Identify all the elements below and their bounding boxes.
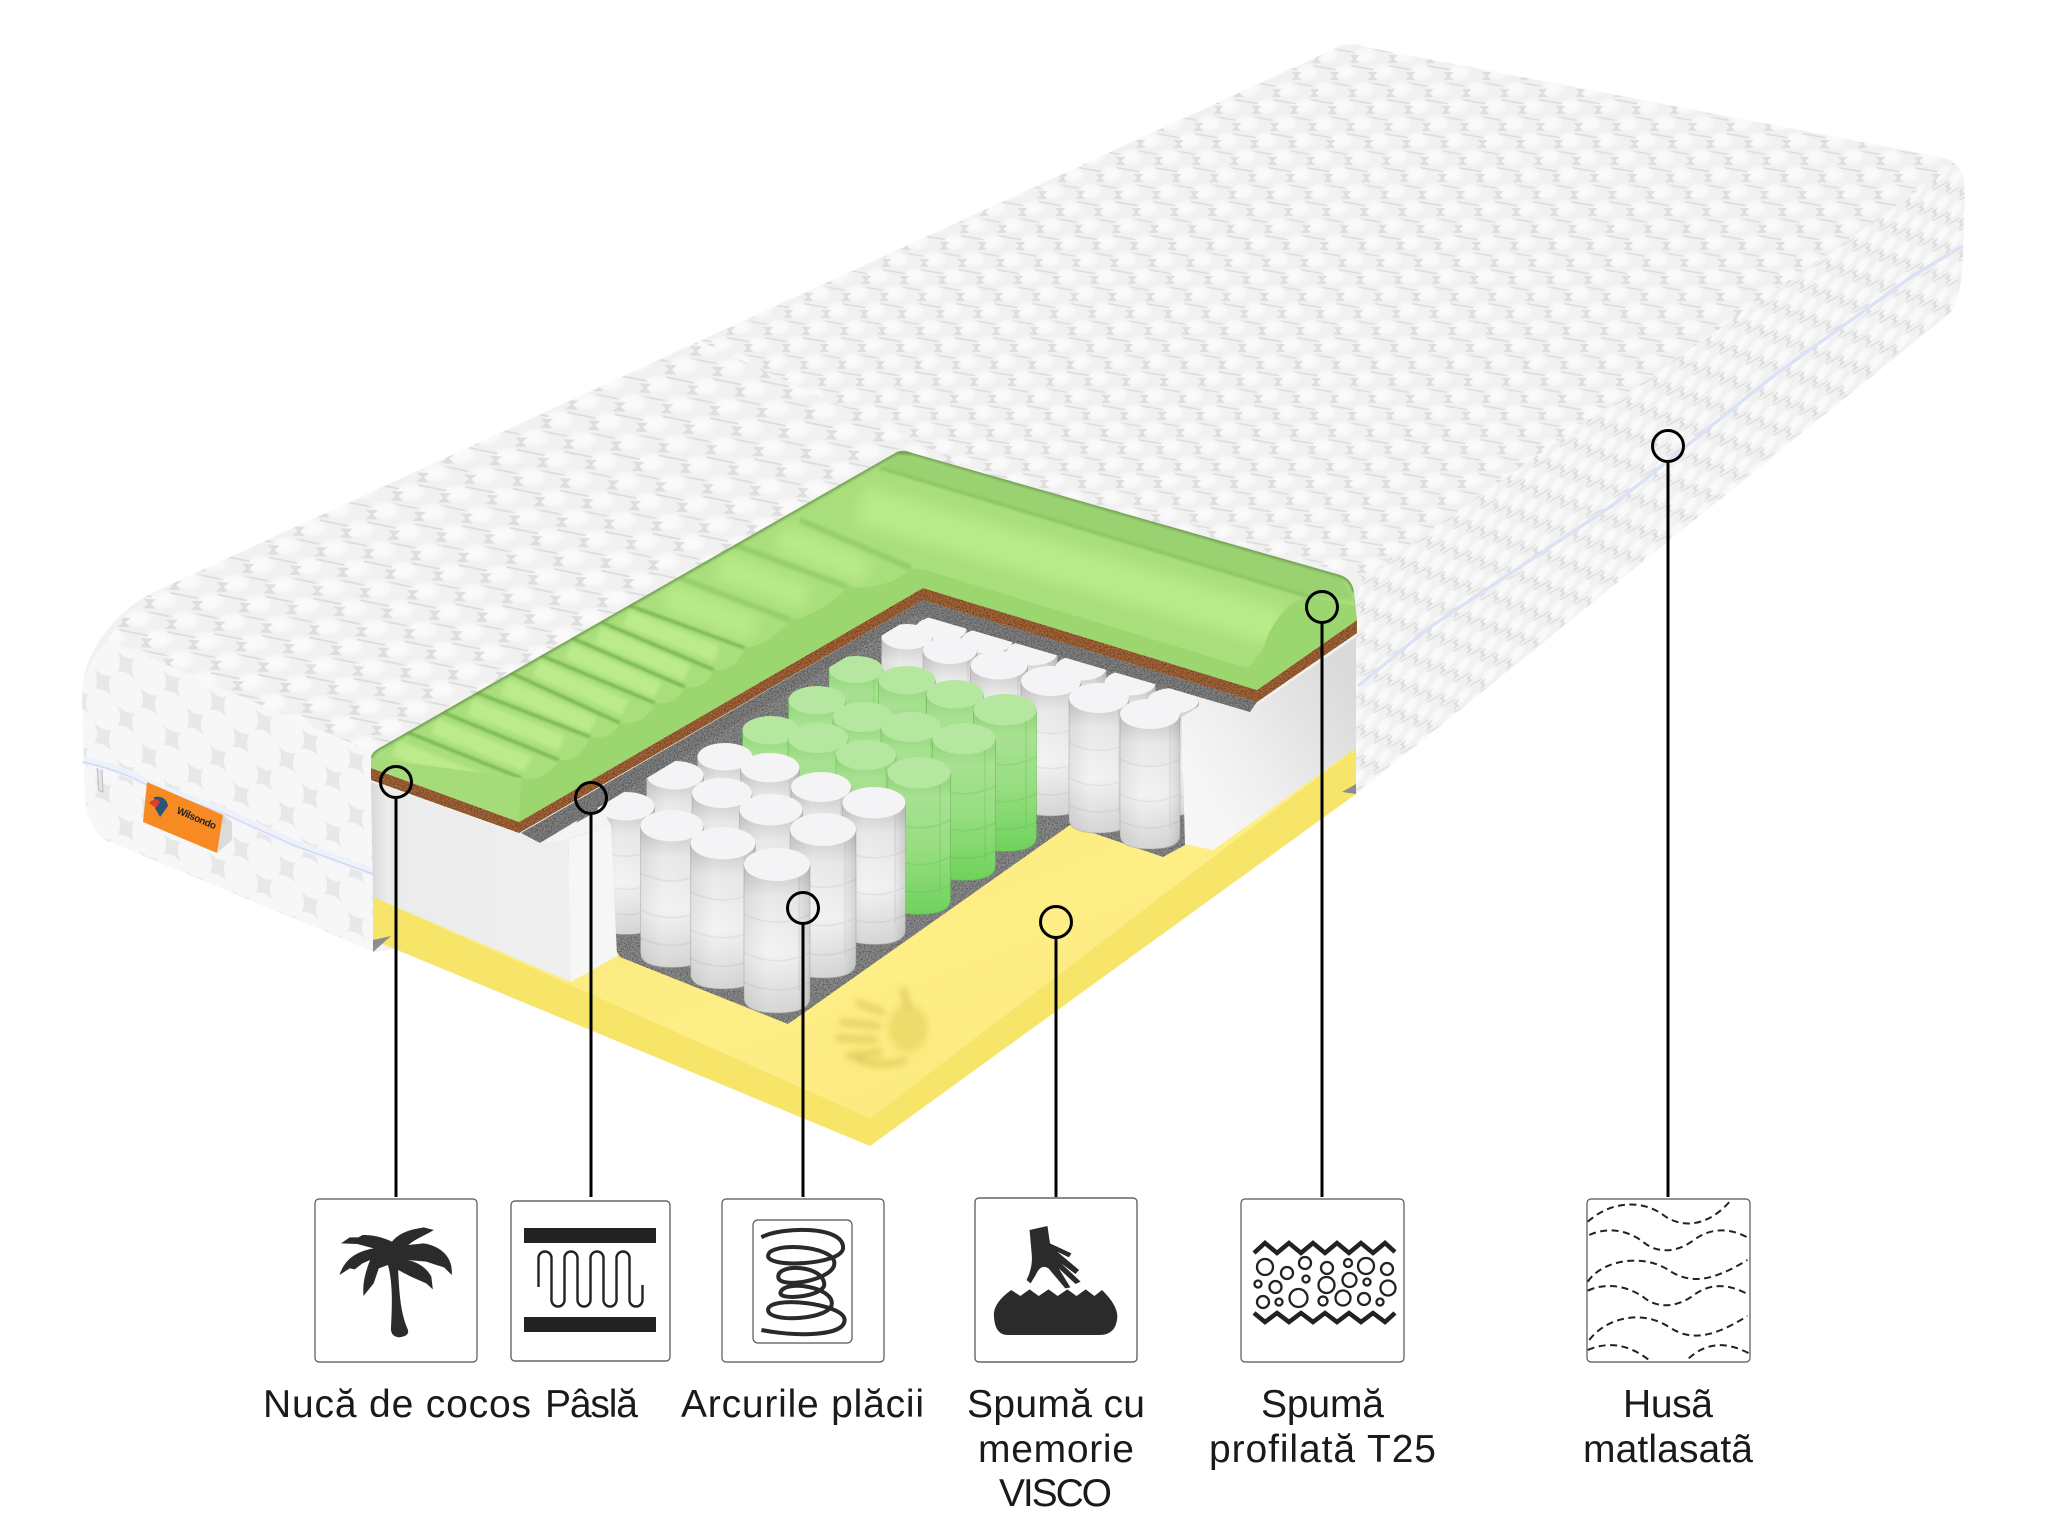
- green shading on ribs: [371, 452, 1354, 790]
- panel: Spumă profilată T25: [1209, 1199, 1436, 1471]
- panel: Arcurile plăcii: [681, 1199, 924, 1426]
- top edge shadow: [371, 452, 1354, 758]
- callout: springs: [788, 892, 818, 1197]
- callout: coconut layer: [380, 766, 412, 1197]
- label: memorie: [978, 1428, 1134, 1471]
- green top surface: [371, 451, 1354, 779]
- panel: Pâslă: [511, 1201, 670, 1426]
- cover top surface, near section: [108, 341, 1010, 752]
- brand label: [143, 782, 232, 853]
- right white foam block: [1182, 637, 1356, 850]
- icon: palm tree: [339, 1227, 452, 1337]
- callout: quilted cover: [1652, 430, 1684, 1197]
- label: [967, 1383, 1145, 1515]
- handprint in foam: [838, 990, 928, 1064]
- mattress illustration: [82, 44, 1965, 1146]
- callout: profiled foam: [1306, 592, 1338, 1197]
- label: [1209, 1383, 1436, 1471]
- label: matlasatã: [1583, 1428, 1753, 1471]
- label: VISCO: [999, 1472, 1112, 1515]
- green front face: [371, 758, 521, 822]
- panel: Husã matlasatã: [1583, 1199, 1753, 1471]
- label: Spumă cu: [967, 1383, 1145, 1426]
- label: Spumă: [1261, 1383, 1384, 1426]
- icon: foam bubbles: [1254, 1243, 1396, 1322]
- rib highlights: [395, 618, 717, 790]
- cover front end: [82, 640, 375, 952]
- pocket springs: [598, 616, 1198, 1013]
- callout: memory foam: [1040, 906, 1072, 1197]
- left white foam block: [371, 782, 617, 982]
- green side face: [371, 451, 1357, 822]
- label: Pâslă: [545, 1383, 638, 1426]
- label: [1583, 1383, 1753, 1471]
- icon: spring coil: [753, 1220, 852, 1343]
- panel: Nucă de cocos: [263, 1199, 531, 1426]
- zipper on long side: [1358, 246, 1963, 686]
- cover top surface, far section: [700, 44, 1955, 577]
- label: Husã: [1623, 1383, 1713, 1426]
- quilted cover: base silhouette: [82, 44, 1965, 952]
- profiled green foam: [371, 451, 1357, 822]
- felt layer: [521, 600, 1257, 843]
- spring bed floor: [560, 605, 1200, 1024]
- broad rib highlights: [666, 505, 1280, 629]
- label: Nucă de cocos: [263, 1383, 531, 1426]
- icon: felt layers: [524, 1228, 656, 1332]
- rib grooves: [402, 468, 1310, 778]
- icon: quilted dashed waves: [1588, 1202, 1749, 1360]
- label: Arcurile plăcii: [681, 1383, 924, 1426]
- callout: felt layer: [576, 782, 606, 1197]
- brand label: Wilsondo: [175, 806, 218, 832]
- panel: Spumă cu memorie VISCO: [967, 1198, 1145, 1515]
- coconut layer: [371, 588, 1357, 833]
- cover long side: [1356, 165, 1965, 794]
- back shoulder band: [880, 452, 1354, 600]
- zipper on front end: [83, 760, 373, 874]
- yellow memory foam base: [373, 748, 1356, 1146]
- label: profilată T25: [1209, 1428, 1436, 1471]
- icon: hand on foam: [994, 1226, 1117, 1335]
